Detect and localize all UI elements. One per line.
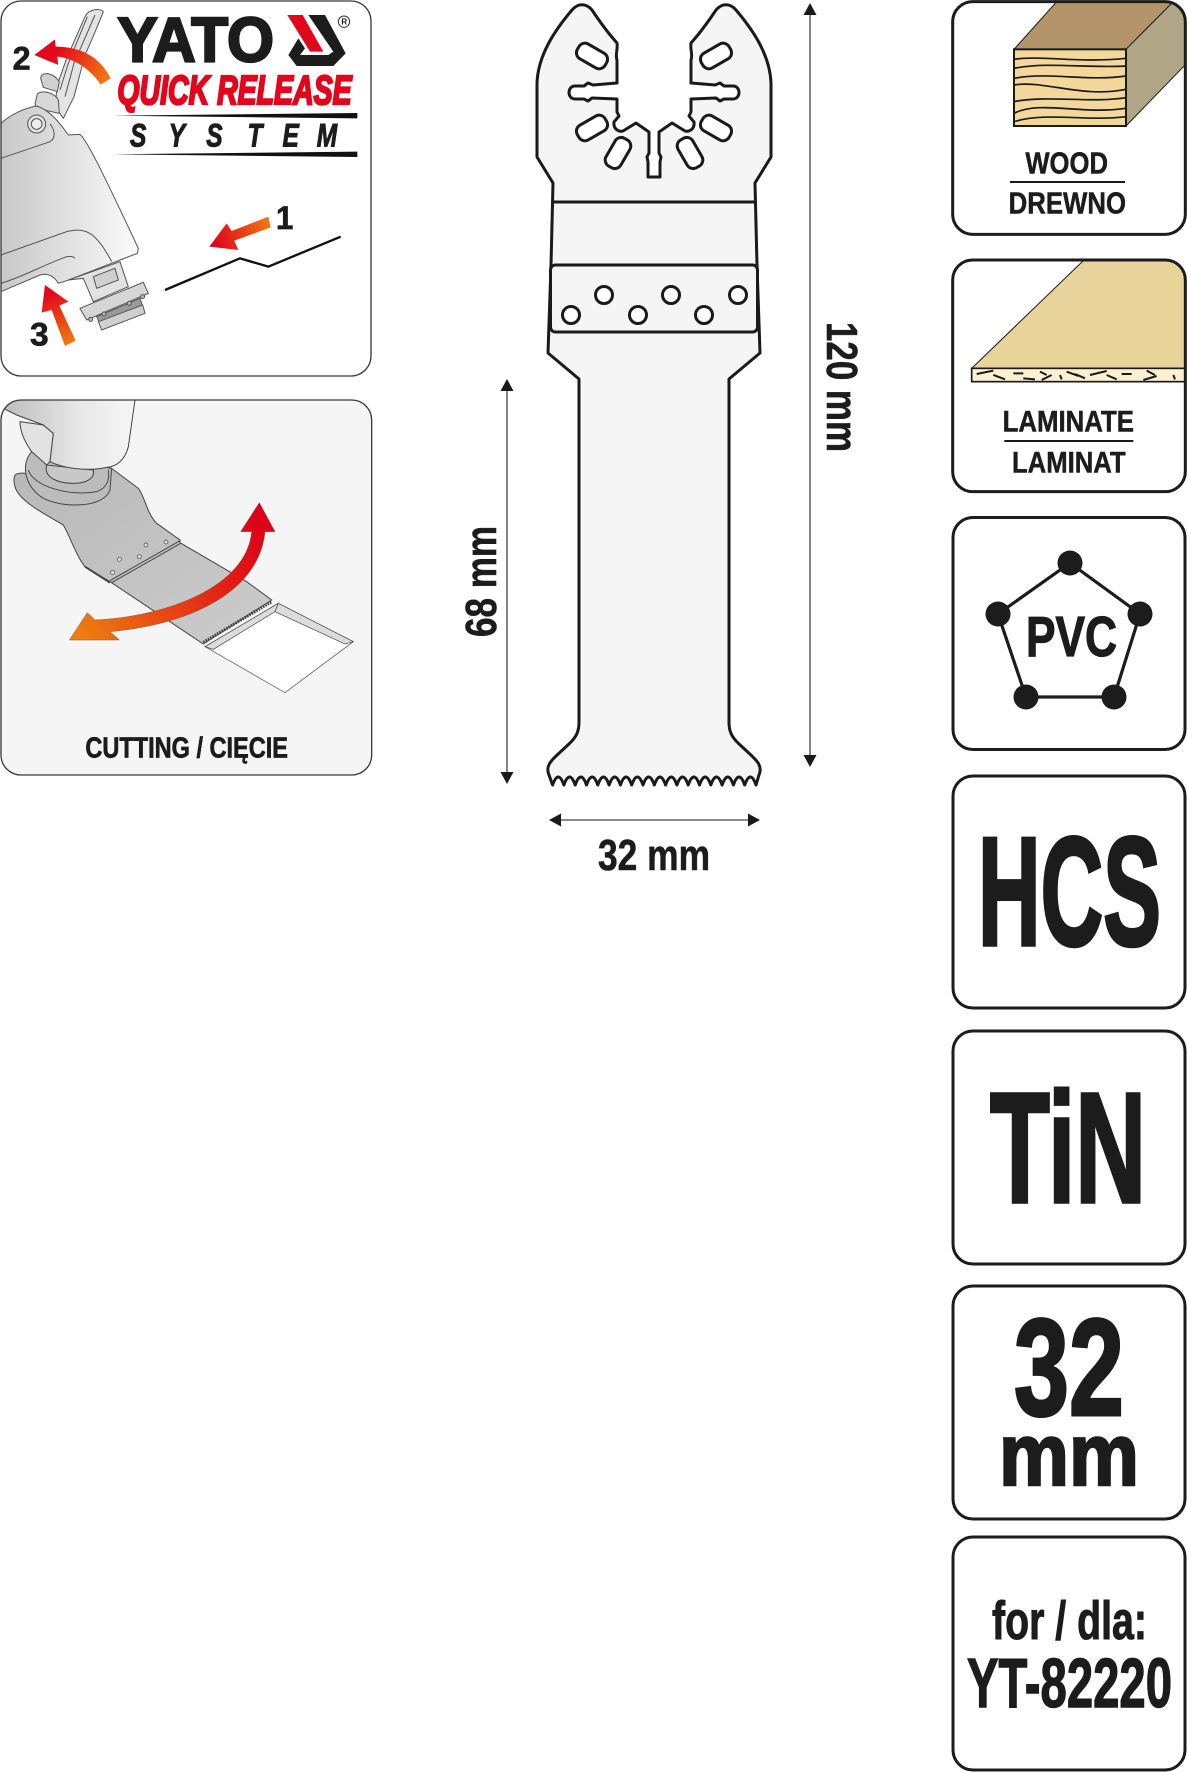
dimension: 68 mm xyxy=(457,379,514,784)
badge: TiN xyxy=(953,1031,1185,1264)
badge border xyxy=(953,2,1185,234)
label: wood / drewno: DREWNO xyxy=(1009,186,1126,220)
number 1: 1 xyxy=(276,200,293,236)
number 3: 3 xyxy=(30,317,49,353)
heading: system with rules: Y xyxy=(169,118,187,155)
label: wood / drewno: WOOD xyxy=(1025,146,1108,180)
badge: laminate xyxy=(953,260,1187,492)
badge: wood xyxy=(953,2,1187,234)
arrow 2 xyxy=(34,39,111,85)
heading: system with rules: E xyxy=(282,118,299,155)
label: 32: 32 xyxy=(1014,1291,1124,1445)
heading: system with rules: T xyxy=(247,118,264,155)
mounting slots xyxy=(574,41,734,171)
panel: cutting xyxy=(0,400,372,775)
label: laminate / laminat: LAMINATE xyxy=(1003,406,1134,439)
icon: pentagon molecule xyxy=(986,550,1152,710)
label: PVC: PVC xyxy=(1026,605,1117,669)
illustration: tool cutting into material xyxy=(0,400,353,693)
heading: system with rules: M xyxy=(317,118,338,155)
blade outline xyxy=(537,5,771,785)
panel border xyxy=(1,1,371,376)
dimension: 68 mm: 68 mm xyxy=(457,526,506,637)
label: laminate / laminat: LAMINAT xyxy=(1012,446,1126,479)
panel border xyxy=(1,400,372,775)
heading: system with rules: S xyxy=(206,118,223,155)
dimension: 120 mm xyxy=(804,3,866,767)
logo: YATO mark xyxy=(287,15,350,66)
arrow 3 xyxy=(42,285,76,346)
dimension: 120 mm: 120 mm xyxy=(817,322,866,452)
badge: PVC xyxy=(953,518,1185,750)
rivet plate xyxy=(550,265,758,332)
badge: HCS xyxy=(953,776,1185,1008)
heading: quick release: QUICK RELEASE xyxy=(117,67,353,113)
rivet holes xyxy=(562,286,746,324)
arrow: oscillation xyxy=(69,503,275,640)
blade drawing xyxy=(537,5,771,785)
dimension: 32 mm: 32 mm xyxy=(598,831,710,880)
label: mm: mm xyxy=(999,1405,1139,1504)
heading: system with rules: S xyxy=(130,118,146,155)
icon: laminate board xyxy=(972,261,1187,382)
label: wood / drewno xyxy=(1009,146,1126,220)
arrow 1 xyxy=(209,217,271,250)
caption: cutting: CUTTING / CIĘCIE xyxy=(85,733,288,765)
badge border xyxy=(953,260,1185,492)
panel: quick release system xyxy=(1,1,371,376)
number 2: 2 xyxy=(13,40,31,76)
logo: YATO wordmark: YATO xyxy=(117,6,274,76)
heading: system with rules xyxy=(113,113,357,157)
blade band line xyxy=(553,200,755,204)
logo: YATO mark: R xyxy=(341,18,347,27)
dimension: 32 mm xyxy=(549,814,760,880)
label: laminate / laminat xyxy=(1003,406,1134,479)
icon: wood block xyxy=(1014,2,1187,126)
illustration: blade side profile xyxy=(165,237,341,290)
badge: compatibility xyxy=(953,1537,1185,1770)
badge: 32 mm xyxy=(953,1286,1185,1519)
illustration: multitool head with lever xyxy=(1,10,148,330)
